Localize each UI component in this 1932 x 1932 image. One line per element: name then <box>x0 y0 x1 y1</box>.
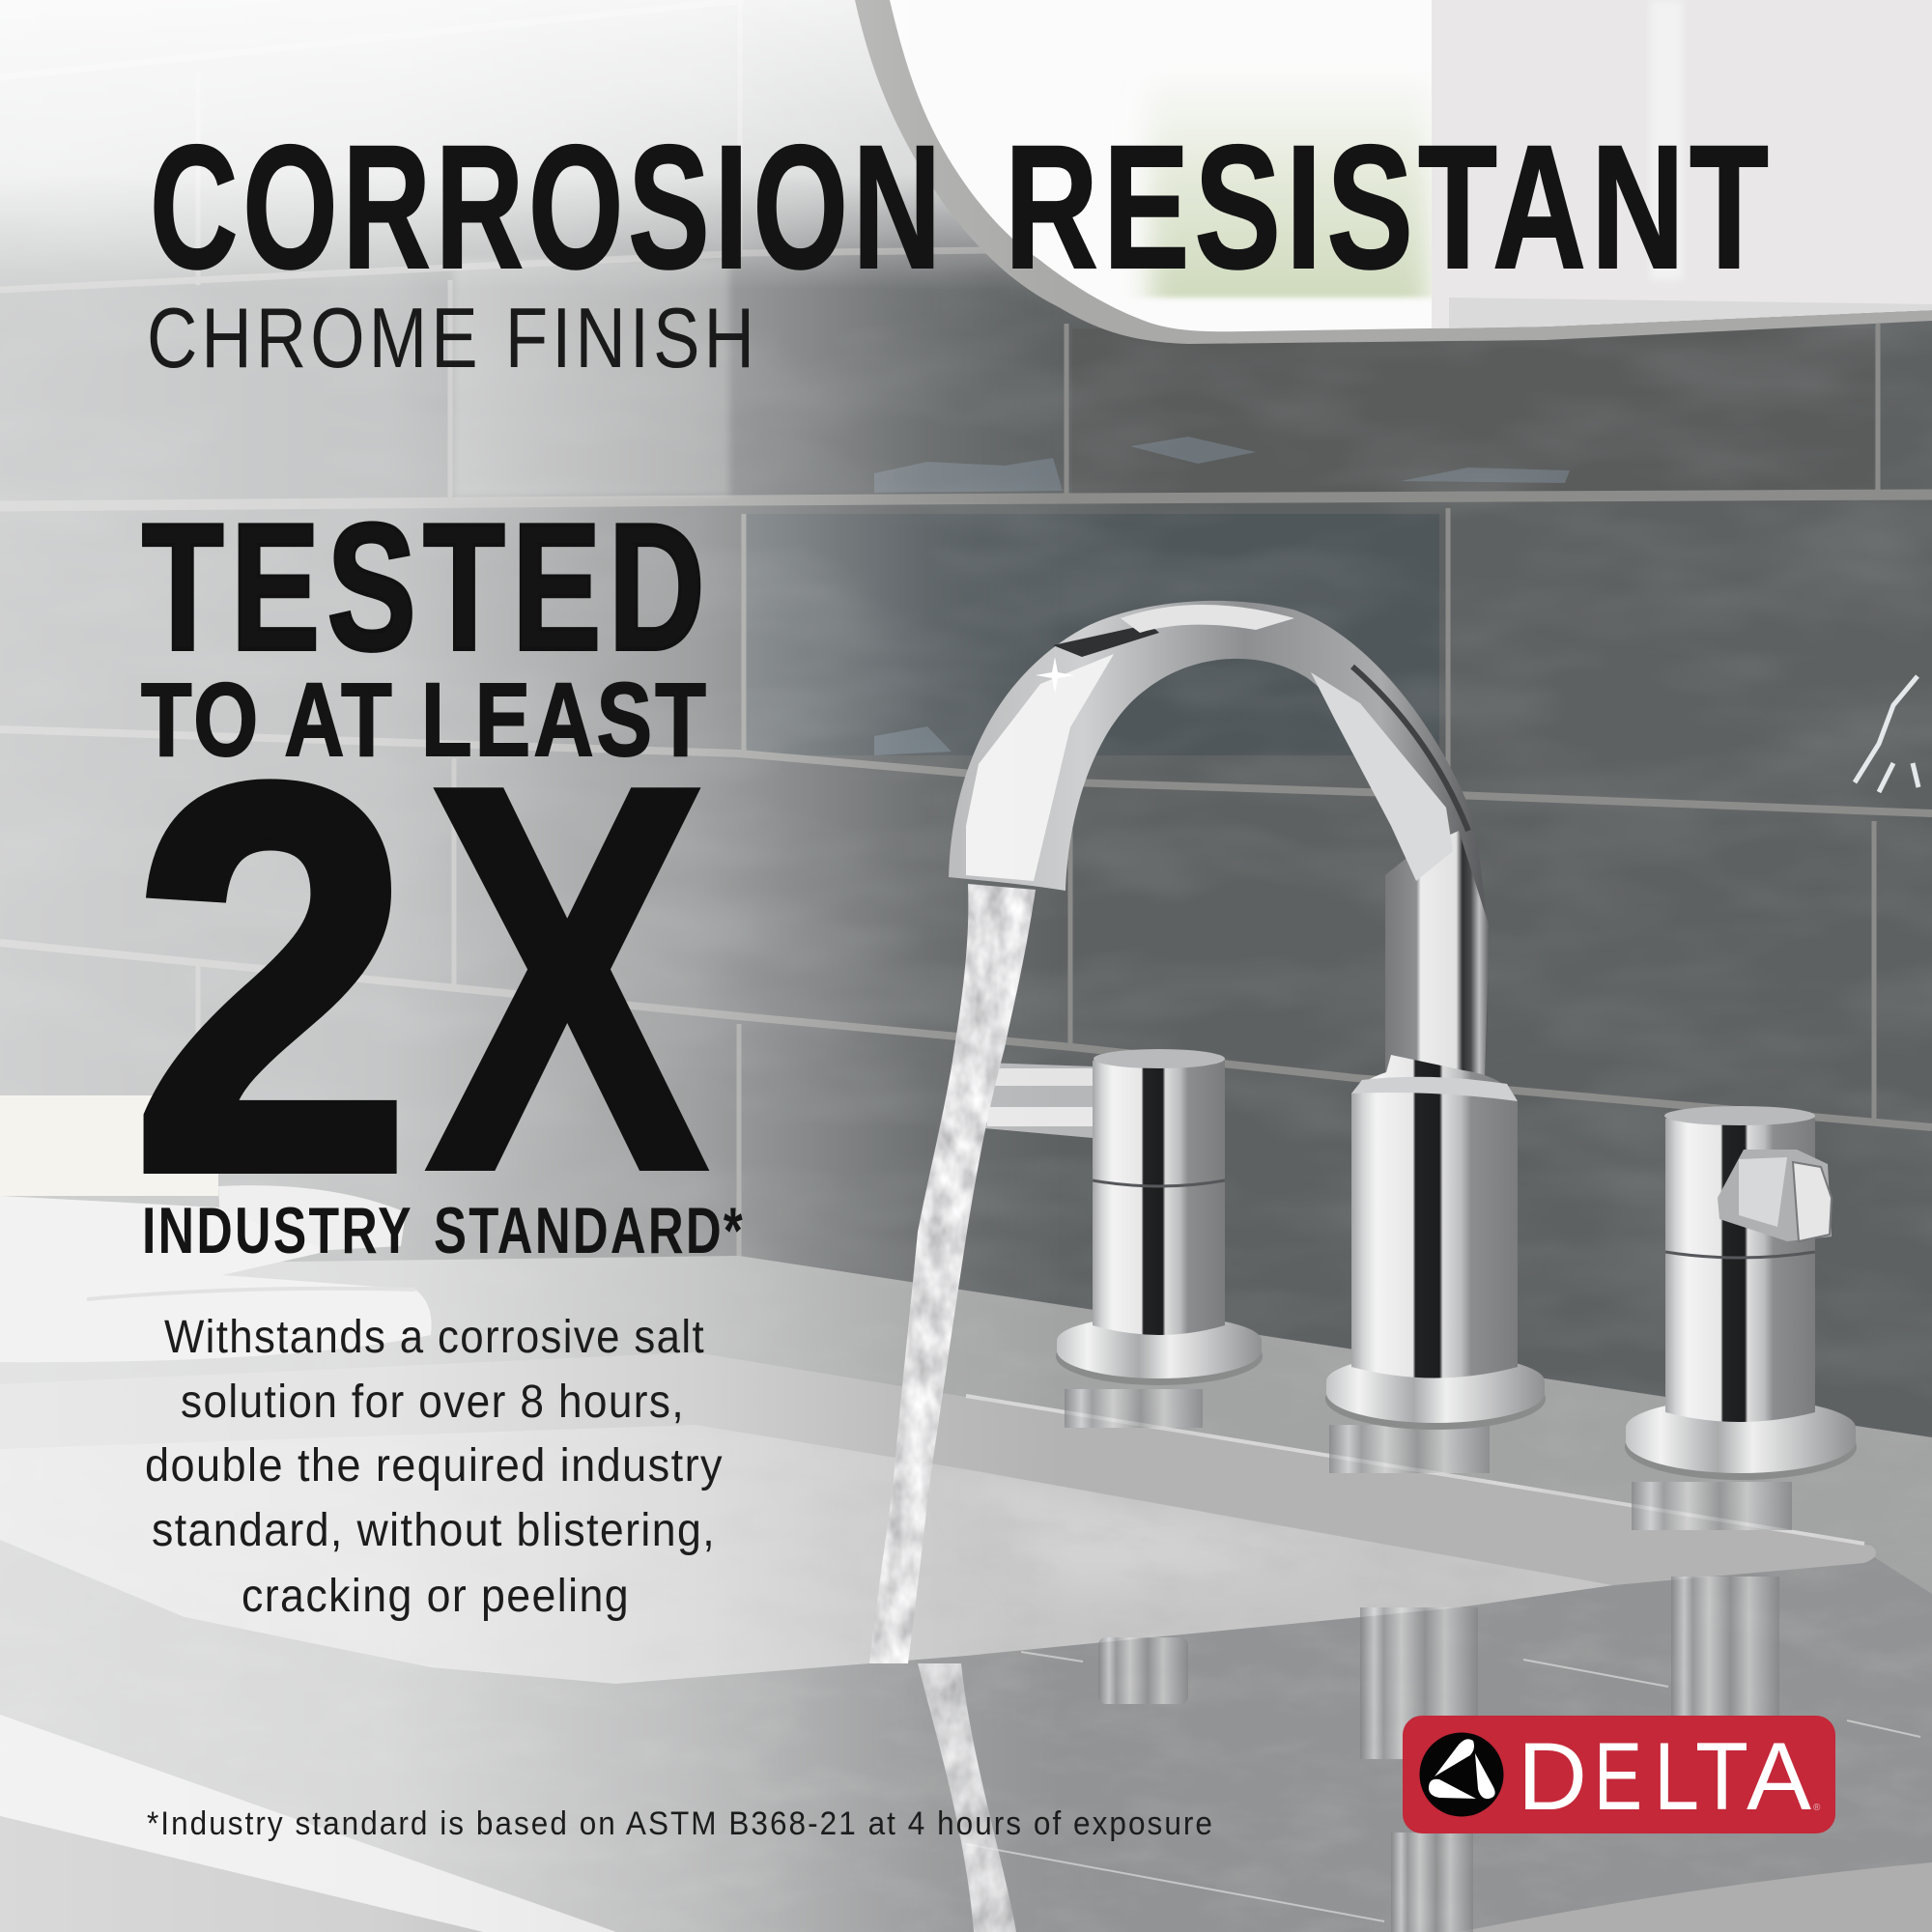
fade on upper wall <box>0 0 1092 290</box>
rim highlight <box>966 1396 1864 1544</box>
body text: Withstands a corrosive salt <box>164 1312 705 1363</box>
claim heading: industry standard: STANDARD* <box>434 1194 745 1267</box>
faucet: right lever <box>1718 1150 1832 1241</box>
front lip of counter <box>0 1715 616 1932</box>
marble counter and sink <box>0 1256 1932 1932</box>
body text: cracking or peeling <box>242 1571 630 1622</box>
marble veins <box>1188 1492 1889 1752</box>
title: CORROSION <box>150 108 946 305</box>
faucet: right handle base <box>1625 1399 1857 1480</box>
chrome reflections in marble <box>1065 1389 1792 1932</box>
body text: solution for over 8 hours, <box>181 1377 685 1428</box>
claim heading: tested: TESTED <box>142 486 712 688</box>
water stream <box>869 884 1036 1932</box>
claim heading: 2X: 2 <box>131 672 412 1285</box>
Delta logo <box>1403 1716 1835 1833</box>
faucet: stem <box>1385 831 1490 1077</box>
faucet: center body <box>1351 1055 1518 1378</box>
faucet: center body base <box>1325 1354 1546 1430</box>
wordmark: L <box>1654 1722 1699 1830</box>
glare lines <box>966 1652 1920 1921</box>
wordmark: E <box>1594 1722 1642 1830</box>
faucet: left supply pipe <box>984 1063 1093 1138</box>
body text: double the required industry <box>145 1440 724 1492</box>
towels and soap <box>0 1095 432 1362</box>
wordmark: D <box>1518 1722 1587 1830</box>
body text <box>145 1312 724 1622</box>
claim heading: to at least: TO AT LEAST <box>141 661 709 778</box>
bottom-left shadow <box>0 1816 483 1932</box>
faucet: right handle <box>1664 1106 1815 1422</box>
claim heading: 2X: X <box>425 672 711 1285</box>
background: tiled wall <box>0 0 1932 1546</box>
icon: Delta triangle mark <box>1420 1733 1503 1816</box>
wordmark <box>1518 1722 1811 1830</box>
footnote: *Industry standard is based on ASTM B368-21 at 4 hours of exposure <box>147 1805 1214 1842</box>
claim heading: industry standard <box>142 1194 745 1267</box>
wordmark: T <box>1695 1722 1748 1830</box>
sink bowl <box>0 1410 1613 1684</box>
lower counter <box>0 1540 1932 1932</box>
wordmark: A <box>1747 1722 1811 1830</box>
body text: standard, without blistering, <box>152 1505 716 1556</box>
faucet: left handle base <box>1056 1316 1263 1385</box>
registered mark: ® <box>1813 1803 1821 1813</box>
claim heading: industry standard: INDUSTRY <box>142 1194 413 1267</box>
faucet: spout highlights <box>966 605 1468 881</box>
bottom-right lip <box>1459 1862 1932 1932</box>
faucet <box>949 601 1857 1480</box>
sink rim band <box>0 1352 1876 1585</box>
mirror with window reflection <box>855 0 1932 344</box>
faucet: arched spout <box>949 601 1488 1077</box>
subtitle: CHROME FINISH <box>147 290 758 385</box>
faucet: left handle <box>1093 1049 1225 1335</box>
claim heading: 2X <box>131 672 711 1285</box>
counter deck <box>0 1256 1932 1932</box>
